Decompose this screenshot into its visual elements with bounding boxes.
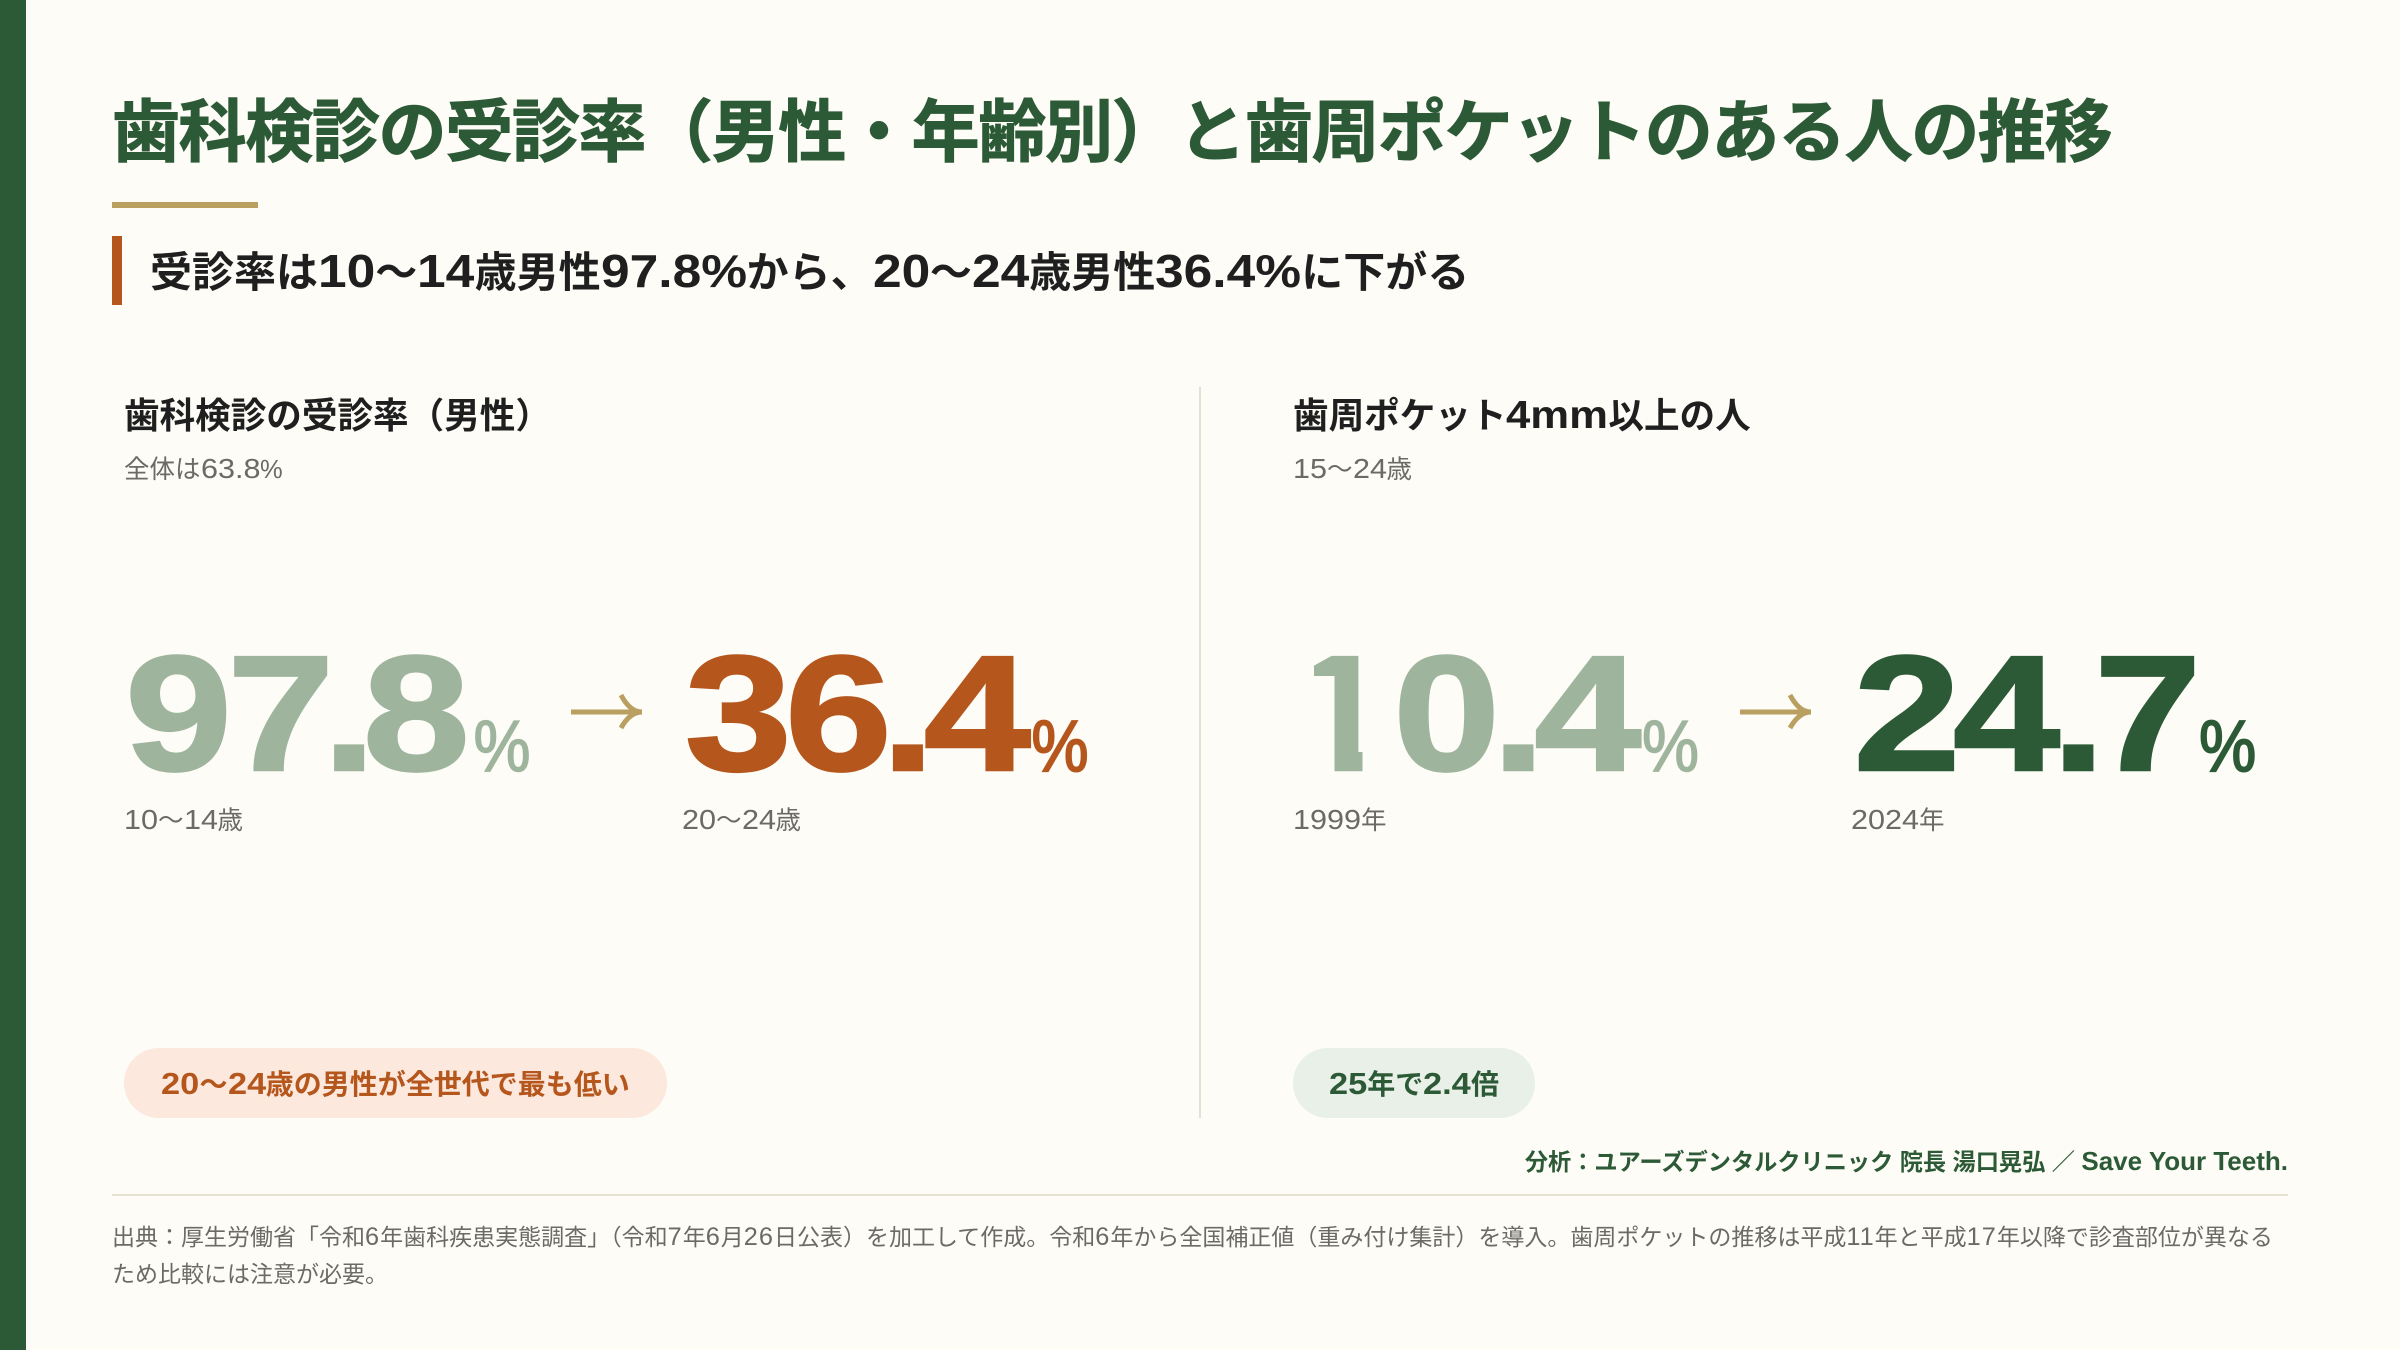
stat: 97.8%: % xyxy=(473,707,530,787)
stat: 10.4%: 1 xyxy=(1286,621,1393,805)
callout pill: 〜 歳の男性が全世代で最も低い xyxy=(199,1069,630,1100)
panel subheading: 63.8 xyxy=(201,453,260,484)
label: 10-14: 〜 歳 xyxy=(158,807,243,835)
stat: 10.4% xyxy=(1314,654,1698,773)
key message text: 14 xyxy=(417,245,475,297)
panel: periodontal pockets xyxy=(1293,394,2256,1118)
callout pill: 25 xyxy=(1329,1066,1367,1101)
panel heading: 歯周ポケット 以上の人 xyxy=(1293,396,1751,436)
arrow xyxy=(571,695,642,728)
panel subheading: 15 xyxy=(1293,453,1327,484)
source note: 出典：厚生労働省「令和6年歯科疾患実態調査」（令和7年6月26日公表）を加工して作成。令和6年から全国補正値（重み付け集計）を導入。歯周ポケットの推移は平成11年と平成17年以降で診査部位が異なる xyxy=(112,1223,2273,1251)
callout pill: 2.4 xyxy=(1423,1066,1471,1101)
label: 10-14: 10 xyxy=(124,804,158,835)
key message text: 36.4% xyxy=(1155,245,1301,297)
left accent bar xyxy=(0,0,26,1350)
panel heading: 4mm xyxy=(1506,394,1608,437)
label: 1999: 1999 xyxy=(1293,804,1361,835)
panel subheading xyxy=(1293,453,1412,484)
panel: dental checkup rate xyxy=(124,396,1088,1118)
key message text: 10 xyxy=(318,245,375,297)
label: 2024: 2024 xyxy=(1851,804,1919,835)
big numbers chart xyxy=(1314,621,2256,805)
analysis credit: 分析：ユアーズデンタルクリニック 院長 湯口晃弘 ／ Save Your Teeth. xyxy=(1525,1146,2288,1176)
label: 10-14: 14 xyxy=(184,804,218,835)
key message accent bar xyxy=(112,236,122,305)
title underline xyxy=(112,202,258,208)
key message text: 受診率は 〜 歳男性 から、 〜 歳男性 に下がる xyxy=(150,249,1469,296)
arrow xyxy=(1740,695,1811,728)
big numbers chart xyxy=(125,621,1088,805)
label: 20-24: 〜 歳 xyxy=(716,807,801,835)
stat: 24.7%: 24.7 xyxy=(1854,621,2201,805)
panel subheading: 24 xyxy=(1353,453,1387,484)
key message text: 24 xyxy=(972,245,1029,297)
callout pill: 20 xyxy=(161,1066,199,1101)
stat: 97.8%: 97.8 xyxy=(125,621,470,805)
stat: 10.4%: % xyxy=(1642,707,1699,787)
footer rule xyxy=(112,1194,2288,1196)
panel heading: 歯科検診の受診率（男性） xyxy=(124,396,551,436)
label: 20-24 xyxy=(682,804,801,835)
callout pill: 年で 倍 xyxy=(1367,1069,1499,1100)
stat: 36.4%: % xyxy=(1032,707,1088,787)
stat: 24.7%: % xyxy=(2199,707,2256,787)
key message text: 20 xyxy=(873,245,930,297)
label: 20-24: 20 xyxy=(682,804,716,835)
label: 10-14 xyxy=(124,804,243,835)
label: 20-24: 24 xyxy=(742,804,776,835)
source note: ため比較には注意が必要。 xyxy=(112,1261,388,1287)
panel subheading: 全体は % xyxy=(124,456,283,484)
panel subheading: 〜 歳 xyxy=(1327,456,1412,484)
source note xyxy=(112,1223,2273,1287)
label: 2024: 年 xyxy=(1919,807,1945,835)
stat: 36.4%: 36.4 xyxy=(685,621,1031,805)
callout pill: 24 xyxy=(228,1066,266,1101)
callout pill xyxy=(124,1048,667,1118)
title: 歯科検診の受診率（男性・年齢別）と歯周ポケットのある人の推移 xyxy=(112,95,2111,171)
stat: 10.4%: 0.4 xyxy=(1393,621,1641,805)
label: 1999: 年 xyxy=(1361,807,1387,835)
key message xyxy=(112,236,1469,305)
panel divider xyxy=(1199,387,1201,1118)
callout pill xyxy=(1293,1048,1535,1118)
key message text: 97.8% xyxy=(601,245,747,297)
